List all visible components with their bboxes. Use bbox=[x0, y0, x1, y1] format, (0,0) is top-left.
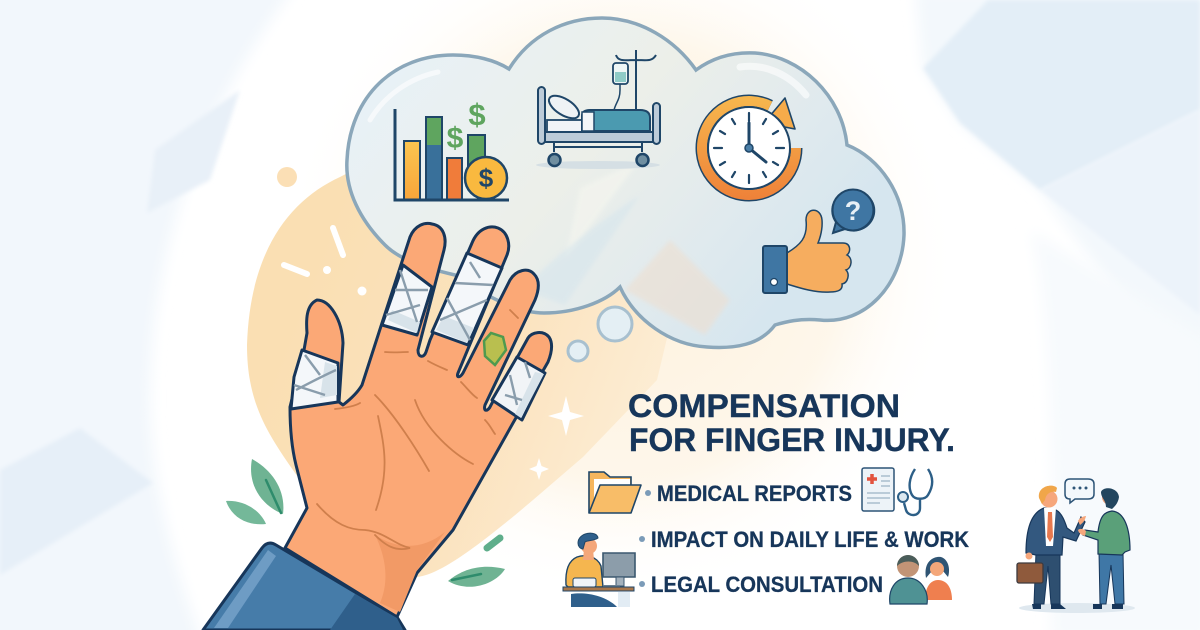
title: COMPENSATION bbox=[628, 388, 900, 424]
pinky bandage bbox=[492, 357, 545, 420]
peach glow behind hand bbox=[247, 0, 960, 600]
palm creases bbox=[317, 274, 518, 549]
title bbox=[628, 388, 955, 458]
green bruise patch bbox=[484, 333, 506, 365]
middle finger bandage bbox=[432, 253, 502, 345]
hand outline bbox=[285, 223, 552, 617]
bullet list: MEDICAL REPORTS bbox=[657, 481, 852, 506]
injured hand bbox=[285, 223, 552, 617]
icon: person working at desk bbox=[563, 533, 635, 607]
blue sleeve bbox=[203, 543, 405, 630]
title: FOR FINGER INJURY. bbox=[629, 422, 955, 458]
thumb bandage bbox=[291, 350, 338, 409]
palm shading bbox=[375, 532, 445, 612]
icon: bar chart with coin: $ bbox=[468, 97, 486, 132]
icon: bar chart with coin bbox=[395, 97, 509, 200]
icon: thumbs up with question: ? bbox=[845, 196, 861, 226]
icon: clock with arrow bbox=[702, 98, 796, 195]
icon: folder bbox=[589, 472, 641, 513]
bullet list: IMPACT ON DAILY LIFE & WORK bbox=[651, 527, 969, 552]
icon: bar chart with coin: $ bbox=[447, 122, 464, 155]
lawyer bbox=[1026, 486, 1086, 609]
green leaves bbox=[226, 459, 505, 587]
thought bubble small bbox=[568, 341, 588, 361]
speech bubble bbox=[1065, 479, 1094, 503]
icon: lawyer and client talking bbox=[1017, 479, 1135, 613]
briefcase bbox=[1017, 563, 1043, 583]
thought bubble large bbox=[598, 307, 632, 341]
client bbox=[1078, 488, 1130, 609]
sparkles bbox=[529, 396, 584, 480]
icon: bar chart with coin: $ bbox=[479, 163, 494, 193]
icon: hospital bed with IV bbox=[536, 50, 660, 169]
icon: two consulting people bbox=[890, 555, 952, 604]
thought cloud bbox=[347, 18, 904, 361]
bullet list: LEGAL CONSULTATION bbox=[651, 572, 883, 597]
bullet list bbox=[639, 481, 969, 597]
icon: medical report and stethoscope bbox=[862, 468, 932, 515]
index finger bandage bbox=[382, 265, 432, 335]
icon: thumbs up with question bbox=[763, 190, 874, 293]
